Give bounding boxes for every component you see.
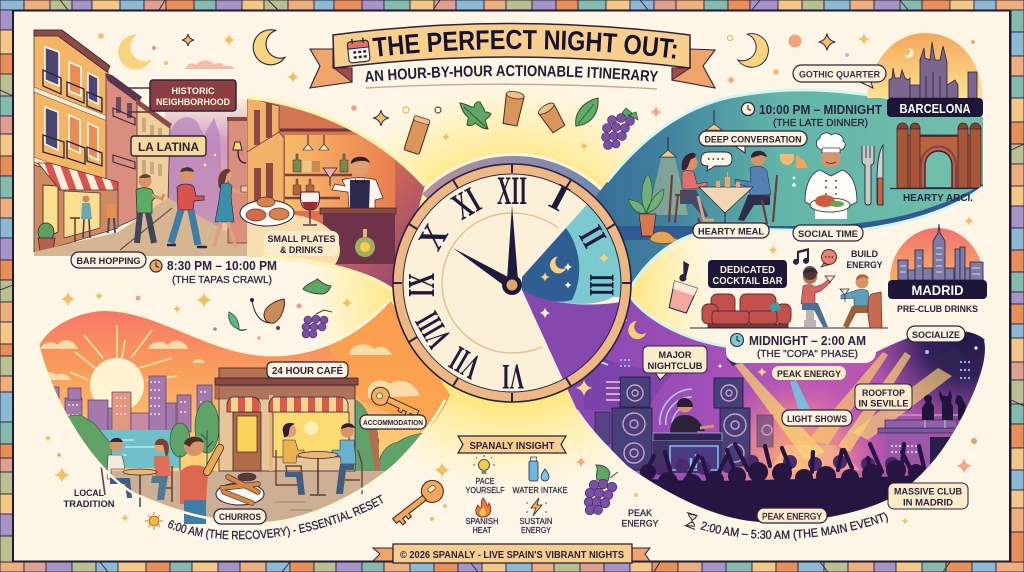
footer ribbon: © 2026 SPANALY - LIVE SPAIN'S VIBRANT NIGHTS — [400, 549, 624, 561]
grapes top — [602, 108, 638, 150]
potted plant — [628, 174, 664, 236]
scene: tapas street in La Latina — [34, 30, 265, 256]
title banner — [309, 22, 716, 90]
label: historic neighborhood — [128, 80, 236, 112]
time: copa phase: (THE "COPA" PHASE) — [757, 349, 858, 360]
Madrid label — [888, 280, 987, 299]
cafe couple — [276, 423, 362, 495]
foreground objects: corks, leaves, grapes — [229, 90, 638, 530]
scene: sunrise at the 24 hour cafe — [39, 300, 450, 524]
leaf 2 — [576, 98, 598, 126]
label: small plates and drinks — [264, 231, 339, 256]
leaf left — [303, 279, 331, 294]
label: small plates and drinks: & DRINKS — [280, 245, 323, 256]
label: historic neighborhood: NEIGHBORHOOD — [156, 97, 230, 107]
arc behind top of clock — [420, 154, 606, 283]
label: massive club in Madrid: IN MADRID — [903, 498, 953, 508]
main title — [374, 49, 678, 59]
label: accommodation — [360, 415, 426, 429]
music note right — [793, 248, 809, 265]
roman numerals: VII — [443, 339, 487, 387]
label: 24 hour cafe: 24 HOUR CAFÉ — [272, 364, 343, 377]
walkers: three friends bar hopping — [136, 167, 248, 247]
roman numerals: II — [571, 219, 614, 254]
churros plate — [216, 473, 264, 505]
left buildings — [34, 30, 172, 252]
calendar icon — [347, 37, 370, 63]
roman numerals: XII — [497, 168, 527, 213]
yellow glow behind clock — [297, 70, 727, 500]
roman numerals: IX — [401, 273, 443, 297]
label: historic neighborhood: HISTORIC — [172, 86, 215, 96]
label: massive club in Madrid — [888, 483, 968, 509]
label: socialize — [907, 326, 965, 342]
bar counter — [320, 208, 396, 214]
roman numerals — [401, 168, 622, 397]
label: build energy: BUILD — [851, 249, 878, 260]
tip: pace yourself — [466, 455, 504, 495]
leaf 1 — [460, 102, 491, 129]
Barcelona label — [887, 98, 983, 117]
bartender — [323, 157, 383, 209]
time: late dinner: (THE LATE DINNER) — [773, 118, 868, 129]
label: hearty meal: HEARTY MEAL — [698, 226, 764, 238]
label: hearty meal — [693, 223, 769, 238]
chef with plate — [805, 133, 857, 219]
small lemon and bottle icon — [355, 229, 375, 257]
subtitle — [365, 76, 658, 82]
tapas plate — [240, 197, 294, 226]
label: massive club in Madrid: MASSIVE CLUB — [894, 486, 962, 498]
label: dedicated cocktail bar — [708, 260, 787, 288]
potted plant — [38, 223, 55, 251]
label: major nightclub — [643, 346, 707, 380]
skyline — [44, 376, 212, 432]
cocktail tumbler — [666, 281, 697, 314]
tip: water intake: WATER INTAKE — [512, 485, 568, 495]
pendant lamps — [648, 110, 722, 215]
upper right wedge — [522, 204, 622, 380]
grapes lower left — [302, 310, 332, 338]
time: tapas crawl: (THE TAPAS CRAWL) — [172, 275, 272, 286]
label: La Latina: LA LATINA — [138, 140, 199, 154]
title banner: AN HOUR-BY-HOUR ACTIONABLE ITINERARY — [365, 65, 658, 82]
title banner: THE PERFECT NIGHT OUT: — [372, 30, 677, 59]
label: dedicated cocktail bar: COCKTAIL BAR — [712, 276, 783, 287]
label: local tradition: LOCAL — [74, 488, 104, 499]
Barcelona skyline with Sagrada Familia — [867, 33, 982, 98]
tip: pace yourself: YOURSELF — [466, 485, 504, 495]
label: major nightclub: MAJOR — [658, 350, 692, 361]
label: peak energy upper: PEAK ENERGY — [777, 369, 842, 380]
label: rooftop in Seville: IN SEVILLE — [858, 398, 908, 410]
martini glass — [600, 362, 608, 366]
street — [34, 198, 265, 256]
tip: sustain energy: SUSTAIN — [520, 516, 552, 526]
label: 24 hour cafe — [267, 362, 348, 378]
label: La Latina — [131, 136, 206, 156]
riverside couple — [101, 438, 172, 507]
roman numerals: III — [582, 274, 622, 296]
speech bubble — [701, 152, 732, 171]
warm floor glow — [247, 214, 340, 265]
scene: tapas bar interior — [247, 99, 425, 288]
label: peak energy near grapes: ENERGY — [622, 518, 659, 530]
label: gothic quarter: GOTHIC QUARTER — [799, 70, 880, 80]
scene: late dinner in Barcelona — [595, 88, 984, 289]
music note left — [680, 262, 689, 281]
small figures at awning — [70, 196, 116, 244]
Arc de Triomf — [897, 123, 981, 188]
label: peak energy near grapes — [622, 508, 659, 530]
leaf small — [229, 312, 247, 330]
label: accommodation: ACCOMMODATION — [363, 418, 423, 427]
label: deep conversation — [699, 131, 807, 153]
time: copa phase — [730, 333, 866, 360]
cork tilted — [537, 101, 567, 134]
cork short — [501, 90, 525, 126]
small food icons — [780, 154, 808, 187]
chat bubble — [821, 250, 836, 267]
label: build energy — [846, 249, 883, 271]
nut and twig — [250, 298, 285, 330]
clouds — [40, 340, 420, 398]
Madrid skyline — [890, 224, 984, 282]
club sparkles — [576, 319, 978, 396]
label: local tradition — [64, 488, 115, 510]
label: build energy: ENERGY — [846, 260, 883, 271]
Madrid label: MADRID — [912, 282, 964, 298]
tip: sustain energy — [520, 498, 552, 535]
scene: cocktail bar lounge — [666, 245, 888, 328]
man in green — [136, 174, 164, 243]
label: dedicated cocktail bar: DEDICATED — [720, 265, 775, 276]
label: local tradition: TRADITION — [64, 499, 115, 510]
label: deep conversation: DEEP CONVERSATION — [704, 134, 802, 146]
label: social time — [793, 225, 863, 241]
decorative sparkles and moons — [44, 25, 977, 525]
woman in teal dress — [214, 169, 248, 247]
time: late dinner: 10:00 PM – MIDNIGHT — [759, 102, 882, 117]
tip: pace yourself: PACE — [476, 476, 495, 486]
label: gothic quarter — [793, 65, 886, 88]
label: pre-club drinks: PRE-CLUB DRINKS — [897, 304, 978, 315]
sun — [70, 325, 178, 412]
label: major nightclub: NIGHTCLUB — [648, 361, 703, 372]
Spanaly insight panel — [458, 436, 568, 535]
label: bar hopping: BAR HOPPING — [76, 256, 140, 266]
tip: spanish heat: HEAT — [472, 525, 492, 535]
label: light shows: LIGHT SHOWS — [787, 414, 847, 425]
roman numerals: XI — [445, 179, 488, 228]
rooftop terrace in Seville — [878, 390, 966, 465]
sky and distant silhouettes — [165, 100, 255, 250]
roman numerals: VIII — [407, 305, 459, 355]
man eating churro — [180, 436, 220, 524]
Barcelona label: BARCELONA — [900, 101, 971, 116]
man in red — [167, 167, 207, 247]
footer ribbon — [373, 544, 650, 563]
label: churros — [214, 509, 266, 524]
accommodation key small — [369, 384, 421, 422]
pink right building and lamp — [227, 117, 249, 243]
man in armchair — [840, 274, 882, 328]
time: tapas crawl — [150, 258, 277, 286]
roman numerals: VI — [502, 357, 524, 397]
label: bar hopping — [71, 252, 146, 268]
insight heading ribbon: SPANALY INSIGHT — [470, 440, 555, 452]
cafe building — [215, 368, 362, 495]
time: late dinner — [742, 102, 882, 129]
label: light shows — [782, 410, 852, 426]
label: small plates and drinks: SMALL PLATES — [268, 234, 336, 245]
clock rim — [393, 164, 631, 402]
label: churros: CHURROS — [219, 512, 261, 522]
cork long — [404, 115, 430, 155]
light beams — [735, 352, 952, 470]
clock hands — [453, 205, 522, 295]
trees — [68, 414, 112, 470]
ground — [111, 471, 386, 522]
midnight caption backing — [726, 328, 876, 363]
roman numerals: X — [410, 217, 456, 257]
floor line — [690, 327, 888, 329]
label: peak energy near grapes: PEAK — [628, 508, 653, 519]
label: hearty arc: HEARTY ARCI. — [903, 192, 973, 204]
wine glass — [300, 192, 320, 225]
roman numerals: I — [543, 176, 575, 220]
label: peak energy lower: PEAK ENERGY — [762, 512, 823, 522]
label: socialize: SOCIALIZE — [912, 330, 960, 341]
time: main event: 2:00 AM – 5:30 AM (THE MAIN EVENT) — [700, 512, 888, 541]
label: social time: SOCIAL TIME — [798, 229, 858, 240]
fork and knife — [862, 145, 883, 205]
time: copa phase: MIDNIGHT – 2:00 AM — [749, 333, 866, 348]
tip: spanish heat — [466, 498, 498, 535]
ribbon tails — [310, 49, 715, 88]
clock — [393, 164, 650, 410]
big grapes — [584, 465, 618, 515]
big key — [388, 476, 448, 530]
DJ and speakers — [595, 377, 773, 473]
label: rooftop in Seville: ROOFTOP — [862, 388, 906, 399]
bread loaf — [650, 231, 677, 244]
dining couple at table — [669, 150, 777, 224]
time: tapas crawl: 8:30 PM – 10:00 PM — [167, 258, 277, 273]
water — [95, 430, 180, 468]
clock face — [393, 164, 631, 402]
label: peak energy lower — [757, 508, 827, 523]
woman on stool — [801, 266, 835, 327]
tip: spanish heat: SPANISH — [466, 516, 498, 526]
label: rooftop in Seville — [855, 384, 912, 410]
crescent moon in club sky — [628, 321, 646, 339]
red sofa — [702, 294, 791, 328]
time: recovery: 6:00 AM (THE RECOVERY) - ESSENTIAL RESET — [168, 494, 383, 540]
striped awning — [38, 163, 118, 190]
tip: sustain energy: ENERGY — [521, 525, 551, 535]
dancing crowd silhouette — [640, 442, 926, 522]
scene: nightclub main event — [568, 296, 985, 522]
ribbon body — [333, 24, 690, 68]
